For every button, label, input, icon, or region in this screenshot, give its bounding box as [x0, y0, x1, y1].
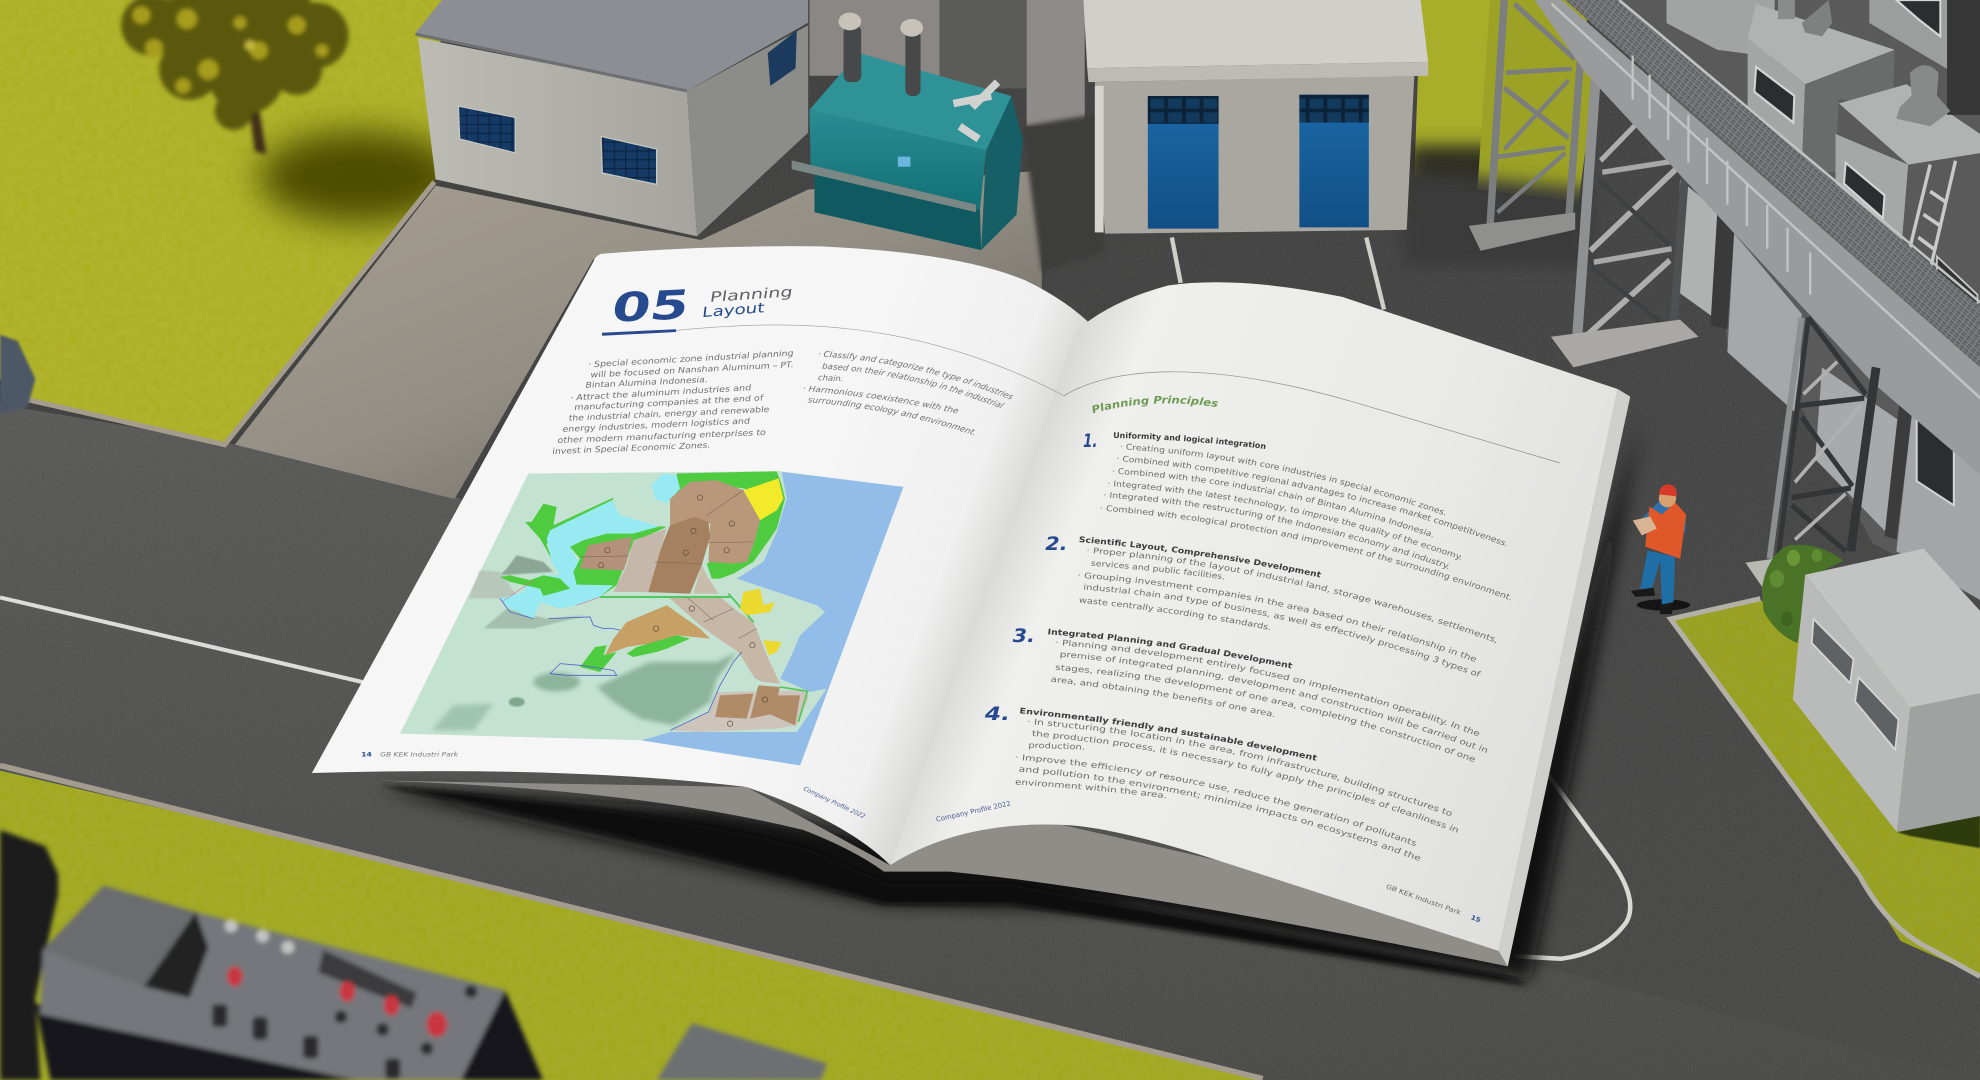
right block: [1896, 402, 1980, 600]
small vehicle left: [0, 335, 35, 414]
header rule: [1064, 372, 1560, 463]
map terrain shading: [432, 555, 737, 730]
wall: [1095, 76, 1414, 234]
left text column: manufacturing companies at the end of: [574, 394, 765, 413]
section number: 05: [611, 282, 691, 332]
block D wall: [1869, 0, 1980, 92]
right text column: based on their relationship in the industrial: [822, 362, 1005, 408]
right text column: · Classify and categorize the type of industries: [819, 351, 1014, 400]
lawn top left: [0, 0, 461, 448]
dark column: [1885, 398, 1913, 540]
side wall: [1897, 693, 1980, 832]
worker figure: [1631, 484, 1690, 614]
map cyan zone: [500, 500, 660, 619]
right text column: · Harmonious coexistence with the: [804, 386, 958, 414]
wall panel: [1815, 367, 1900, 536]
map tan east: [693, 565, 718, 594]
map sea: [642, 472, 903, 765]
block B top: [1748, 4, 1895, 84]
map red outline: [502, 580, 600, 605]
buttons dark: [212, 985, 477, 1079]
footer right: [1385, 883, 1482, 924]
dark end block: [0, 830, 58, 1080]
map brown north: [670, 480, 760, 564]
map brown west: [580, 537, 632, 570]
map green north: [670, 471, 785, 579]
curb bottom: [0, 765, 1263, 1079]
buttons white: [225, 920, 294, 954]
cab block: [43, 885, 196, 987]
lower cabinet: [814, 167, 981, 250]
window: [458, 106, 515, 153]
title underline: [602, 329, 676, 336]
tower 3: [1770, 318, 1876, 559]
vest: [1645, 502, 1686, 559]
map cyan pond: [652, 474, 680, 504]
map green south belt: [627, 635, 690, 657]
buttons red: [227, 966, 447, 1037]
map yellow plots east: [763, 640, 782, 655]
tree: [121, 0, 349, 154]
control panel: [40, 912, 505, 1080]
canopy: [121, 0, 349, 130]
principle 4: production.: [1029, 742, 1084, 750]
map land base: [400, 471, 903, 765]
header rule: [676, 325, 1064, 395]
principle 2: waste centrally according to standards.: [1080, 598, 1270, 630]
map green lake side: [500, 575, 570, 596]
principle 3: 3.: [1013, 625, 1035, 647]
right text column: chain.: [818, 373, 844, 384]
lawn right of centre building: [1414, 0, 1509, 177]
map plot markers: [598, 495, 768, 726]
footer company: Company Profile 2022: [801, 785, 867, 820]
side wall: [687, 25, 808, 236]
dark column: [1710, 214, 1734, 329]
map tan zone: [613, 529, 667, 592]
worker shadow: [1637, 599, 1690, 611]
roof: [1083, 0, 1428, 68]
dark slot: [144, 912, 208, 998]
footer right: 15: [1469, 914, 1482, 924]
principle 2: 2.: [1045, 533, 1068, 555]
front wall: [418, 38, 697, 236]
footer right: GB KEK Industri Park: [1385, 883, 1462, 917]
principle 1: Uniformity and logical integration: [1114, 432, 1266, 449]
left text column: invest in Special Economic Zones.: [552, 441, 711, 457]
principle 1: · Creating uniform layout with core industries in special economic zones.: [1120, 444, 1445, 516]
map ochre zone: [605, 605, 710, 655]
teal equipment: [792, 13, 1023, 250]
tower 1 base: [1469, 212, 1575, 251]
valve: [953, 82, 998, 139]
roof: [415, 0, 808, 91]
principle 1: · Combined with competitive regional advantages to increase market competitiveness.: [1117, 456, 1506, 546]
door left: [1148, 96, 1219, 229]
principle 2: Scientific Layout, Comprehensive Development: [1079, 536, 1322, 578]
chimney: [1802, 0, 1832, 36]
book shadow: [379, 417, 1642, 985]
right text column: [804, 351, 1014, 436]
principle 3: stages, realizing the development of one area, completing the construction of one: [1056, 664, 1475, 762]
chimney: [844, 25, 861, 82]
top: [809, 53, 1011, 150]
principle 3: · Planning and development entirely focused on implementation operability. In the: [1056, 640, 1480, 736]
principle 4: [984, 703, 1458, 861]
walkway grating: [1565, 0, 1980, 367]
right page: [890, 282, 1618, 951]
principle 2: services and public facilities.: [1091, 561, 1224, 580]
principle 4: 4.: [984, 703, 1010, 725]
eave: [1087, 62, 1428, 82]
principle 1: · Integrated with the restructuring of the Indonesian economy and industry.: [1104, 492, 1449, 569]
principle 2: · Grouping investment companies in the area based on their relationship in the: [1078, 572, 1476, 662]
chimney: [1896, 65, 1950, 126]
map spine: [668, 597, 780, 684]
industrial plant: [1469, 0, 1980, 600]
map south plots: [715, 685, 800, 725]
right lawn: [1667, 594, 1980, 979]
right page content: [935, 372, 1560, 924]
principle 4: Environmentally friendly and sustainable development: [1020, 708, 1318, 761]
head: [1659, 490, 1676, 507]
section title: Layout: [701, 299, 766, 320]
map green west wedge: [525, 498, 613, 562]
map south outline: [780, 687, 807, 722]
concrete yard: [235, 171, 1042, 499]
front: [809, 110, 986, 210]
map green south: [580, 645, 617, 672]
panel display: [318, 950, 417, 1008]
right side: [981, 96, 1023, 250]
wall panel: [1677, 180, 1717, 318]
windows: [1812, 619, 1853, 683]
side window: [1937, 256, 1977, 321]
footer left: GB KEK Industri Park: [380, 751, 459, 758]
ladder: [1903, 161, 1956, 299]
block A wall: [1666, 0, 1775, 57]
shadow: [1897, 814, 1980, 848]
tower 1: [1490, 0, 1580, 226]
footer company: Company Profile 2022: [935, 799, 1012, 824]
footer left: 14: [361, 751, 372, 758]
map green centre: [570, 526, 667, 597]
principle 4: · Improve the efficiency of resource use, reduce the generation of pollutants: [1016, 754, 1416, 846]
block D windows: [1896, 0, 1940, 36]
principle 3: [1012, 625, 1488, 762]
rear mass: [1609, 0, 1980, 600]
trunk: [249, 107, 266, 154]
left text column: other modern manufacturing enterprises to: [557, 428, 766, 445]
lawn behind tower: [1477, 0, 1594, 202]
boots: [1631, 588, 1673, 614]
map: [400, 471, 903, 765]
door right: [1299, 95, 1369, 227]
curb around lawn: [25, 182, 434, 445]
windows: [1855, 677, 1899, 750]
left text column: will be focused on Nanshan Aluminum – PT.: [590, 360, 794, 380]
small gray block foreground: [657, 1023, 827, 1080]
principle 2: [1045, 533, 1496, 677]
principle 3: premise of integrated planning, development and construction will be carried out in: [1060, 652, 1488, 753]
chassis: [35, 990, 543, 1080]
lawn bottom: [0, 758, 1263, 1080]
principle 1: [1083, 430, 1511, 600]
block B left: [1748, 38, 1805, 172]
section title: [701, 284, 793, 320]
principle 1: · Combined with ecological protection and improvement of the surrounding environment.: [1100, 505, 1511, 600]
map south block: [672, 690, 808, 732]
arm and shirt: [1642, 500, 1686, 539]
locomotive foreground: [0, 830, 543, 1080]
left text column: the industrial chain, energy and renewable: [568, 405, 770, 423]
tree shadow: [259, 131, 461, 222]
principle 2: industrial chain and type of business, as well as effectively processing 3 types of: [1084, 584, 1482, 677]
principle 3: Integrated Planning and Gradual Development: [1048, 628, 1292, 668]
band: [792, 160, 976, 212]
bush: [1762, 545, 1843, 643]
wall panel: [1727, 233, 1802, 415]
parking lines: [1172, 237, 1384, 309]
page stack: [379, 389, 1630, 966]
window: [601, 136, 657, 184]
principle 1: 1.: [1083, 430, 1097, 452]
block C windows: [1844, 163, 1885, 218]
legs: [1640, 551, 1675, 605]
left text column: · Special economic zone industrial planning: [588, 349, 794, 370]
background structures: [809, 0, 1105, 272]
clipboard: [1633, 517, 1657, 535]
left text column: · Attract the aluminum industries and: [570, 383, 753, 403]
small gray building and bush: [1745, 545, 1980, 848]
tower 2 base: [1551, 320, 1699, 367]
block B right: [1802, 50, 1895, 172]
parking line right: [1515, 773, 1630, 959]
left page: [312, 246, 1092, 865]
section title: Planning: [709, 284, 793, 305]
map yellow plot: [743, 479, 783, 520]
right edge: [1499, 389, 1630, 966]
lawn shadow under tower: [1408, 145, 1572, 221]
principle 1: · Integrated with the latest technology, to improve the quality of the economy.: [1108, 480, 1462, 560]
block B windows: [1754, 67, 1794, 122]
left text column: energy industries, modern logistics and: [562, 417, 751, 434]
map yellow plots: [740, 589, 775, 615]
front wall: [1793, 575, 1910, 832]
map dark brown centre: [645, 517, 710, 594]
chimney: [905, 30, 921, 96]
principle 3: area, and obtaining the benefits of one area.: [1051, 678, 1274, 717]
road left: [0, 404, 1980, 1080]
principle 4: · In structuring the location in the area, from infrastructure, building structures to: [1028, 718, 1452, 816]
planning principles heading: Planning Principles: [1092, 396, 1218, 414]
map boundary: [500, 599, 742, 730]
walkway fascia: [1535, 0, 1980, 475]
principle 1: · Combined with the core industrial chain of Bintan Alumina Indonesia.: [1112, 468, 1433, 538]
map plot dividers: [580, 490, 757, 639]
centre white building: [1083, 0, 1428, 234]
principle 4: environment within the area.: [1016, 780, 1166, 798]
side window: [768, 30, 797, 86]
ground shadow: [1402, 171, 1591, 265]
helmet: [1659, 484, 1677, 496]
principle 2: · Proper planning of the layout of industrial land, storage warehouses, settlements,: [1088, 548, 1496, 644]
road marking left: [0, 597, 379, 686]
block C left: [1836, 134, 1908, 268]
building left gray roof: [415, 0, 808, 236]
principle 4: the production process, it is necessary to fully apply the principles of cleanliness in: [1032, 730, 1458, 832]
railing: [1552, 0, 1980, 398]
left text column: Bintan Alumina Indonesia.: [585, 375, 708, 390]
brochure: [312, 246, 1630, 966]
tower 2: [1577, 80, 1685, 341]
left text column: [552, 349, 794, 457]
left page content: [361, 282, 1098, 822]
roof: [1805, 549, 1980, 707]
principle 4: and pollution to the environment; minimize impacts on ecosystems and the: [1019, 767, 1420, 861]
right curb: [1671, 599, 1980, 976]
block C top: [1839, 84, 1980, 165]
tower foot: [1745, 559, 1777, 589]
right text column: surrounding ecology and environment.: [808, 398, 975, 436]
small badge: [898, 157, 910, 167]
map green roads: [600, 594, 758, 730]
